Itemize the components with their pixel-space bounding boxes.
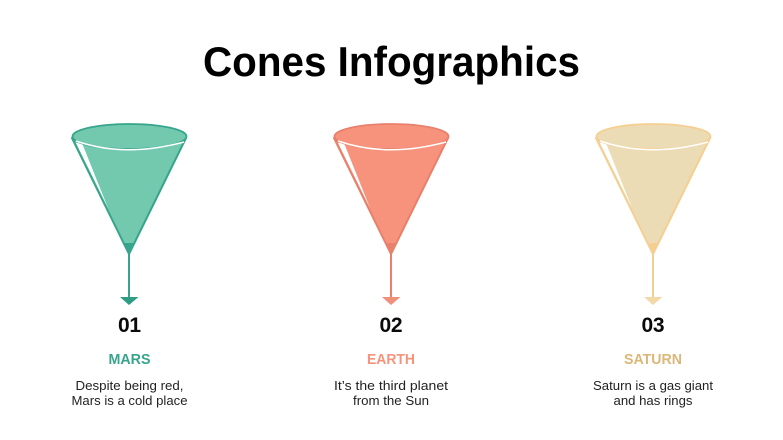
icon: mars cone xyxy=(72,124,186,254)
text: mars description: Despite being red, xyxy=(76,378,184,393)
panel: mars xyxy=(72,124,188,408)
panel: earth xyxy=(334,124,448,408)
icon: saturn cone xyxy=(596,124,710,254)
heading: mars: MARS xyxy=(108,351,150,368)
number: 03: 03 xyxy=(642,314,664,337)
icon: earth cone xyxy=(334,124,448,254)
title: Cones Infographics xyxy=(203,38,580,85)
heading: earth: EARTH xyxy=(367,351,415,368)
number: 01: 01 xyxy=(118,314,141,337)
text: earth description: It’s the third planet xyxy=(334,378,448,393)
arrow: saturn xyxy=(644,254,662,305)
text: mars description xyxy=(72,378,188,408)
text: mars description: Mars is a cold place xyxy=(72,393,188,408)
heading: saturn: SATURN xyxy=(624,351,682,368)
arrow: earth xyxy=(382,254,400,305)
text: saturn description xyxy=(593,378,713,408)
number: 02: 02 xyxy=(380,314,402,337)
panel: saturn xyxy=(593,124,713,408)
text: earth description xyxy=(334,378,448,408)
text: saturn description: and has rings xyxy=(614,393,693,408)
arrow: mars xyxy=(120,254,138,305)
text: earth description: from the Sun xyxy=(353,393,429,408)
text: saturn description: Saturn is a gas giant xyxy=(593,378,713,393)
